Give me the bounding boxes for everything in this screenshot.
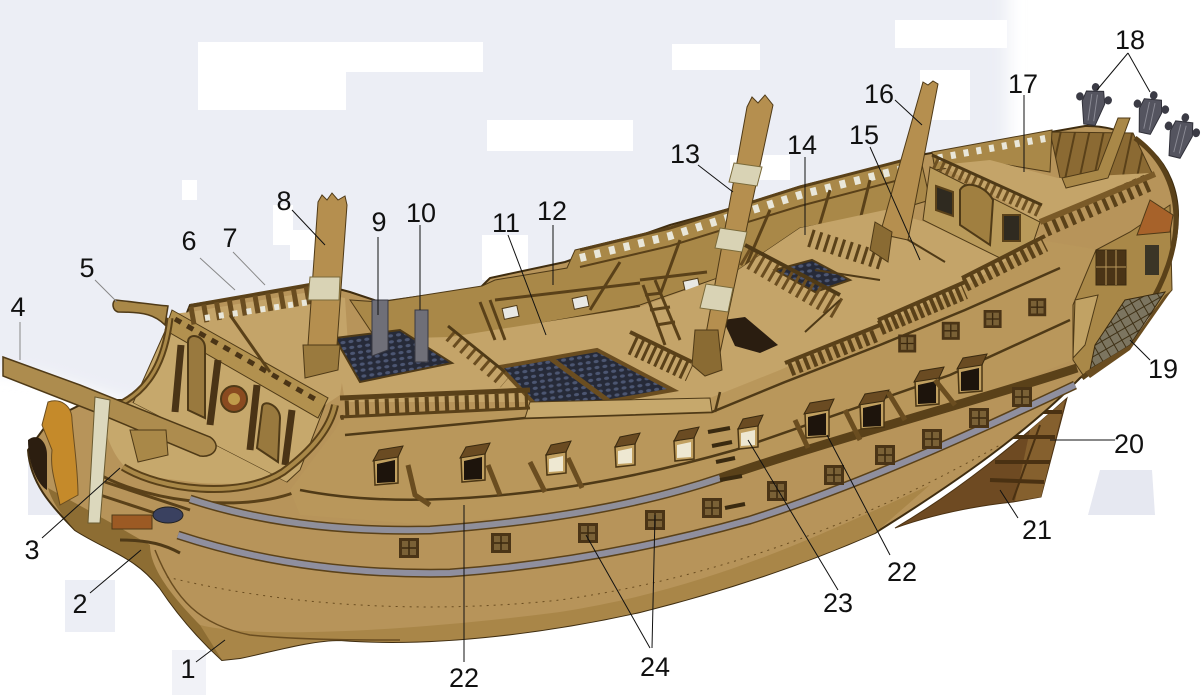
gammoning rope xyxy=(88,397,110,523)
fore deck bitts xyxy=(372,300,428,362)
mizzen mast xyxy=(870,81,938,262)
open hatch xyxy=(723,317,778,353)
number labels: 8 xyxy=(276,186,292,216)
cathead xyxy=(113,300,168,325)
forecastle deck xyxy=(172,292,348,405)
number labels: 1 xyxy=(180,654,196,684)
bitts xyxy=(130,430,168,462)
grate fore xyxy=(335,330,452,382)
upper small windows xyxy=(898,298,1046,352)
deck rails and ladders xyxy=(448,235,945,382)
fore rail xyxy=(190,285,310,372)
number labels: 21 xyxy=(1022,515,1052,545)
entry steps xyxy=(708,428,745,508)
rudder and stern post xyxy=(895,398,1067,528)
number labels: 3 xyxy=(24,535,40,565)
number labels: 20 xyxy=(1114,429,1144,459)
number labels: 24 xyxy=(640,652,670,682)
number labels: 4 xyxy=(10,292,26,322)
number labels: 12 xyxy=(537,196,567,226)
number labels: 11 xyxy=(492,208,520,238)
lower windows xyxy=(399,387,1032,558)
main mast xyxy=(692,95,773,376)
white erasure patches xyxy=(182,20,1007,280)
number labels: 18 xyxy=(1115,25,1145,55)
keel shading xyxy=(200,485,930,660)
lion figurehead xyxy=(28,401,78,505)
number labels: 17 xyxy=(1008,69,1038,99)
number labels: 9 xyxy=(371,207,387,237)
waist wall xyxy=(290,240,1100,525)
poop wall and deck xyxy=(932,118,1153,222)
grate main xyxy=(500,350,673,413)
cabin bulkhead xyxy=(923,155,1042,258)
wales xyxy=(167,368,1077,607)
far bulwark and rail xyxy=(350,156,930,345)
main deck xyxy=(335,210,1040,402)
stern lanterns xyxy=(1072,81,1202,161)
number labels: 16 xyxy=(864,79,894,109)
grate aft xyxy=(775,260,850,292)
number labels: 2 xyxy=(72,589,88,619)
stern carving and gallery xyxy=(1073,138,1176,378)
bow plaque and vent xyxy=(112,507,400,640)
bowsprit xyxy=(3,357,216,456)
number labels: 22 xyxy=(887,557,917,587)
number labels: 19 xyxy=(1148,354,1178,384)
number labels: 10 xyxy=(406,198,436,228)
number labels: 7 xyxy=(222,223,238,253)
number labels: 14 xyxy=(787,130,817,160)
number labels: 22 xyxy=(449,663,479,693)
fore bulkhead wall xyxy=(133,310,328,482)
number labels: 6 xyxy=(181,226,197,256)
upper gun ports xyxy=(373,354,987,485)
number labels: 5 xyxy=(79,253,95,283)
number labels: 23 xyxy=(823,588,853,618)
fore deck well xyxy=(103,403,287,484)
bow shading xyxy=(48,488,222,660)
number labels: 15 xyxy=(849,120,879,150)
bow curved rim xyxy=(95,318,342,518)
number labels: 13 xyxy=(670,139,700,169)
hull silhouette xyxy=(28,126,1178,660)
fore mast xyxy=(303,193,347,378)
knees on hull xyxy=(408,380,955,505)
near balustrades xyxy=(340,174,1155,417)
